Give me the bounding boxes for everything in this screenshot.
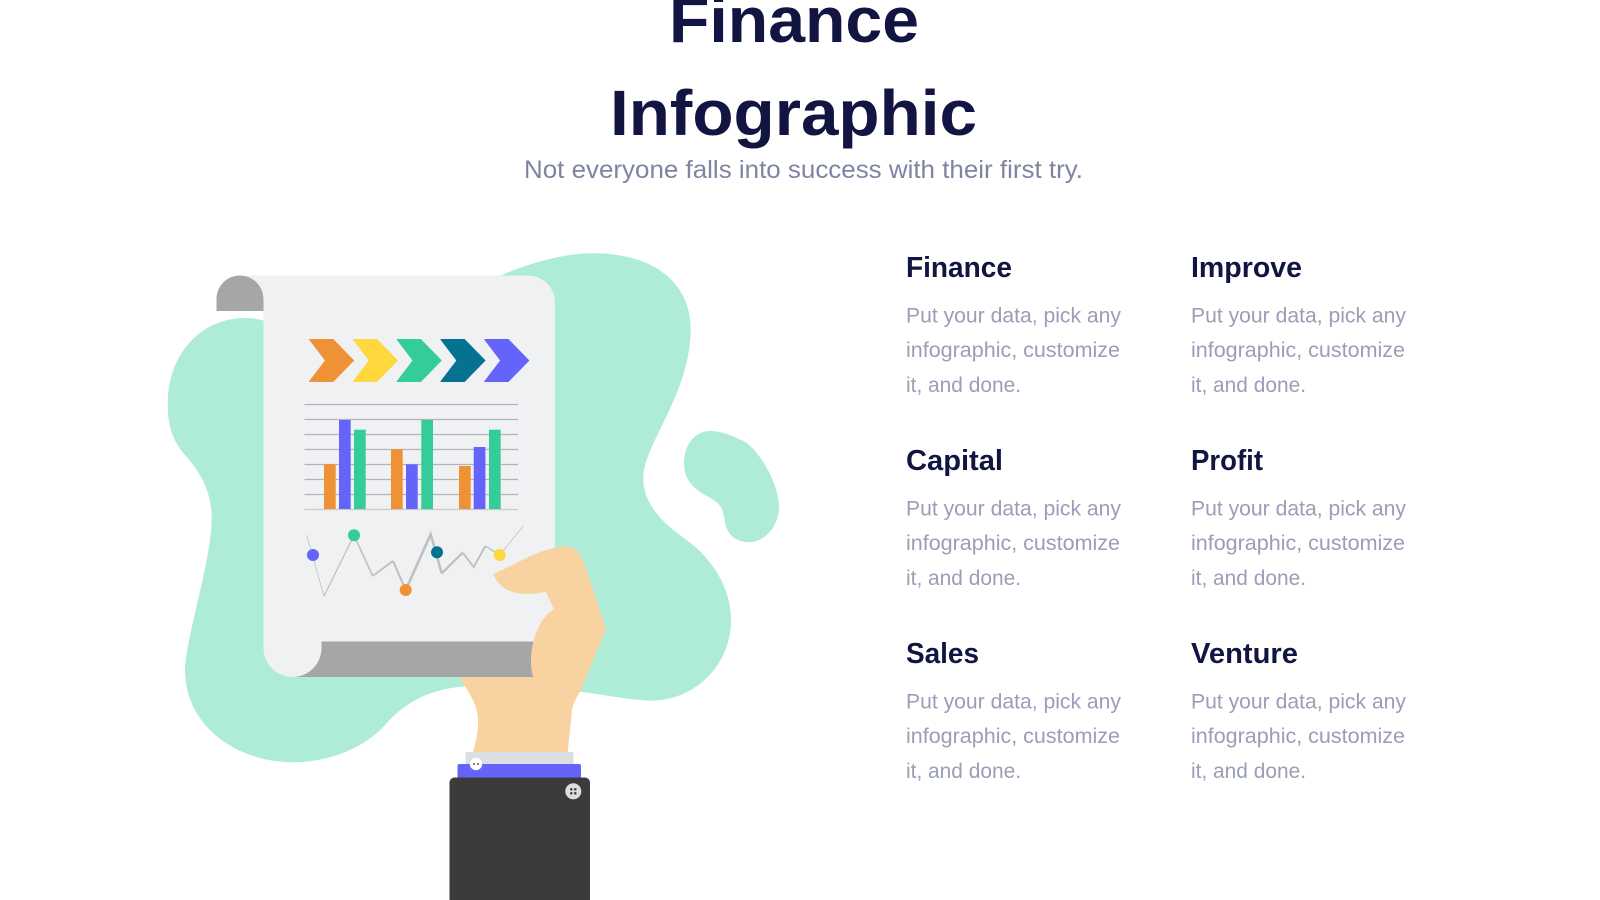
title <box>610 0 977 149</box>
text block: Finance <box>906 252 1121 397</box>
text block: Finance: infographic, customize <box>906 339 1120 362</box>
icon: jacket button <box>565 783 581 799</box>
subtitle: Not everyone falls into success with their first try. <box>524 156 1083 184</box>
hand <box>460 547 606 752</box>
text block: Sales: it, and done. <box>906 760 1021 783</box>
shirt cuff <box>466 752 574 765</box>
line chart <box>307 526 523 596</box>
text block: Venture: Put your data, pick any <box>1191 690 1406 714</box>
text block: Finance: Put your data, pick any <box>906 304 1121 328</box>
text block: Improve: it, and done. <box>1191 374 1306 397</box>
text block: Venture <box>1191 638 1406 783</box>
background blob: large mint shape <box>168 253 731 762</box>
text block: Capital: Put your data, pick any <box>906 498 1121 520</box>
text block: Profit: infographic, customize <box>1191 532 1405 555</box>
paper roll: bottom grey strip <box>292 642 540 677</box>
text block: Improve <box>1191 252 1406 397</box>
text block: Venture: infographic, customize <box>1191 725 1405 748</box>
text block: Improve: Improve <box>1191 252 1302 284</box>
text block: Capital: Capital <box>906 445 1003 477</box>
purple shirt sleeve <box>458 764 581 778</box>
text block: Profit: Put your data, pick any <box>1191 498 1406 520</box>
icon: white cuff button <box>470 758 482 770</box>
background blob: small mint shape <box>684 431 779 542</box>
bar chart <box>304 404 518 510</box>
text block: Capital: infographic, customize <box>906 532 1120 555</box>
dark jacket sleeve <box>450 778 590 900</box>
text block: Sales: Sales <box>906 638 979 670</box>
text block: Sales: Put your data, pick any <box>906 690 1121 714</box>
text block: Venture: Venture <box>1191 638 1298 670</box>
paper sheet <box>240 276 555 677</box>
paper roll: top grey tab <box>216 276 264 311</box>
text block: Capital: it, and done. <box>906 567 1021 590</box>
text block: Venture: it, and done. <box>1191 760 1306 783</box>
text block: Finance: it, and done. <box>906 374 1021 397</box>
text block: Profit: Profit <box>1191 445 1263 477</box>
illustration: hand holding finance report <box>168 253 779 900</box>
text block: Improve: Put your data, pick any <box>1191 304 1406 328</box>
text block: Profit <box>1191 445 1406 590</box>
chevron row <box>310 340 529 382</box>
title: Infographic <box>610 77 977 149</box>
text block: Improve: infographic, customize <box>1191 339 1405 362</box>
text block: Profit: it, and done. <box>1191 567 1306 590</box>
text block: Sales <box>906 638 1121 783</box>
text block: Capital <box>906 445 1121 590</box>
text block: Finance: Finance <box>906 252 1012 284</box>
text block: Sales: infographic, customize <box>906 725 1120 748</box>
